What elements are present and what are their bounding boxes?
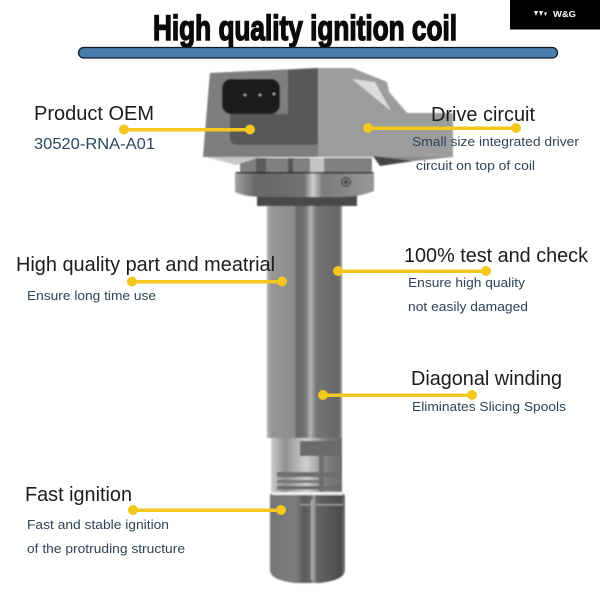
description: Small size integrated driver — [412, 134, 580, 149]
logo badge: W&G — [553, 10, 576, 19]
heading: High quality part and meatrial — [16, 254, 275, 276]
leader line — [318, 390, 477, 400]
description — [408, 275, 528, 314]
callout: Product OEM — [34, 103, 255, 153]
heading: 100% test and check — [404, 245, 589, 267]
title: High quality ignition coil — [153, 9, 457, 48]
ignition coil product image — [203, 68, 453, 583]
coil shaft — [267, 205, 342, 438]
description: not easily damaged — [408, 299, 528, 314]
leader line — [128, 505, 286, 515]
icon: logo mark — [534, 11, 547, 16]
coil boot cap — [270, 492, 345, 583]
description — [412, 134, 580, 173]
callout: 100% test and check — [333, 245, 589, 314]
leader line — [127, 276, 287, 286]
heading: Fast ignition — [25, 484, 132, 506]
leader line — [333, 266, 491, 276]
description: circuit on top of coil — [416, 158, 535, 173]
description: Fast and stable ignition — [27, 517, 169, 532]
connector socket — [222, 79, 280, 114]
coil head housing — [203, 68, 453, 166]
description: Ensure high quality — [408, 275, 526, 290]
heading: Product OEM — [34, 103, 154, 125]
description — [27, 517, 185, 556]
heading: Diagonal winding — [411, 368, 562, 390]
heading: Drive circuit — [431, 104, 535, 126]
title underline bar — [78, 48, 558, 58]
description: Eliminates Slicing Spools — [412, 399, 567, 414]
callout: Drive circuit — [363, 104, 580, 173]
leader line — [363, 123, 521, 133]
description: of the protruding structure — [27, 541, 185, 556]
leader line — [119, 124, 255, 134]
logo badge — [510, 0, 600, 30]
description: Ensure long time use — [27, 288, 156, 303]
callout: High quality part and material — [16, 254, 287, 303]
coil collar — [235, 158, 374, 206]
part number: 30520-RNA-A01 — [34, 136, 155, 153]
callout: Fast ignition — [25, 484, 286, 556]
callout: Diagonal winding — [318, 368, 567, 414]
coil spring section — [271, 437, 342, 492]
